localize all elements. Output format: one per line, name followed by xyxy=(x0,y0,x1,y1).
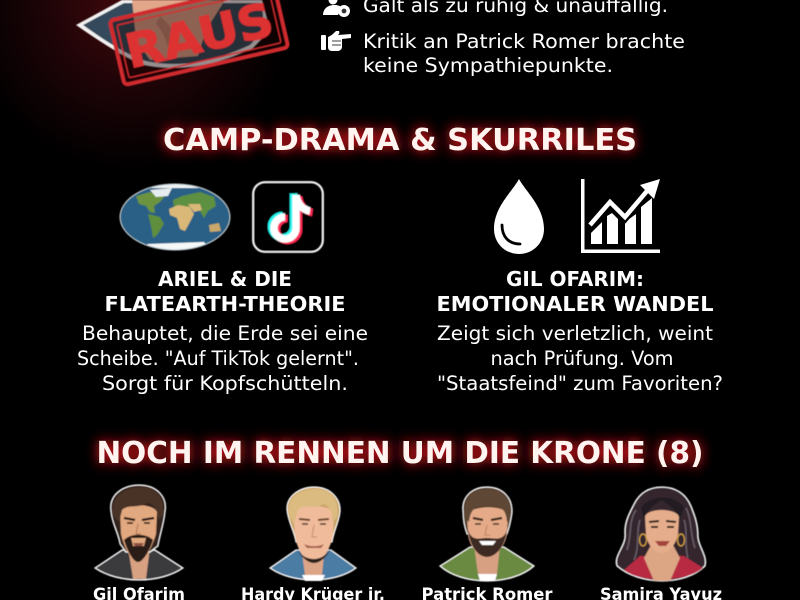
block: Gil Ofarim xyxy=(436,267,723,395)
block: Gil Ofarim: GIL OFARIM: xyxy=(506,267,644,291)
icon: tear drop xyxy=(494,179,544,254)
heading: remaining: NOCH IM RENNEN UM DIE KRONE (8) xyxy=(96,436,704,471)
block: Gil Ofarim: "Staatsfeind" zum Favoriten? xyxy=(437,372,723,395)
portrait: Gil Ofarim xyxy=(95,485,183,580)
block: Ariel: Sorgt für Kopfschütteln. xyxy=(102,372,348,395)
text: criticism: Kritik an Patrick Romer brachte xyxy=(363,30,685,53)
icon: TikTok xyxy=(253,182,323,252)
name labels xyxy=(93,585,722,600)
block: Gil Ofarim: Zeigt sich verletzlich, weint xyxy=(437,322,713,345)
icon: rising chart xyxy=(581,179,660,253)
panel: top bullet list xyxy=(321,0,685,77)
icon: person with coin xyxy=(323,0,350,17)
portrait fragment behind stamp xyxy=(76,0,270,68)
block: Ariel: Behauptet, die Erde sei eine xyxy=(82,322,368,345)
panel: top bullet list: keine Sympathiepunkte. xyxy=(363,54,613,77)
block: Ariel: Scheibe. "Auf TikTok gelernt". xyxy=(77,347,359,370)
block: Ariel: FLATEARTH-THEORIE xyxy=(104,292,346,316)
heading: remaining: NOCH IM RENNEN UM DIE KRONE (8) xyxy=(96,436,704,471)
portrait: Samira Yavuz xyxy=(616,487,706,581)
stamp: RAUS over portrait xyxy=(76,0,288,85)
block: Gil Ofarim: EMOTIONALER WANDEL xyxy=(436,292,714,316)
heading: camp drama: CAMP-DRAMA & SKURRILES xyxy=(163,123,637,158)
subheading: ARIEL & DIE xyxy=(158,267,292,291)
block: Ariel xyxy=(77,267,368,395)
icon: pointing hand xyxy=(321,31,351,51)
portrait: Patrick Romer xyxy=(440,487,534,581)
icon: flat earth xyxy=(120,183,230,252)
portrait: Hardy Krüger jr. xyxy=(270,487,356,581)
block: Gil Ofarim: nach Prüfung. Vom xyxy=(490,347,674,370)
heading: camp drama: CAMP-DRAMA & SKURRILES xyxy=(163,123,637,158)
